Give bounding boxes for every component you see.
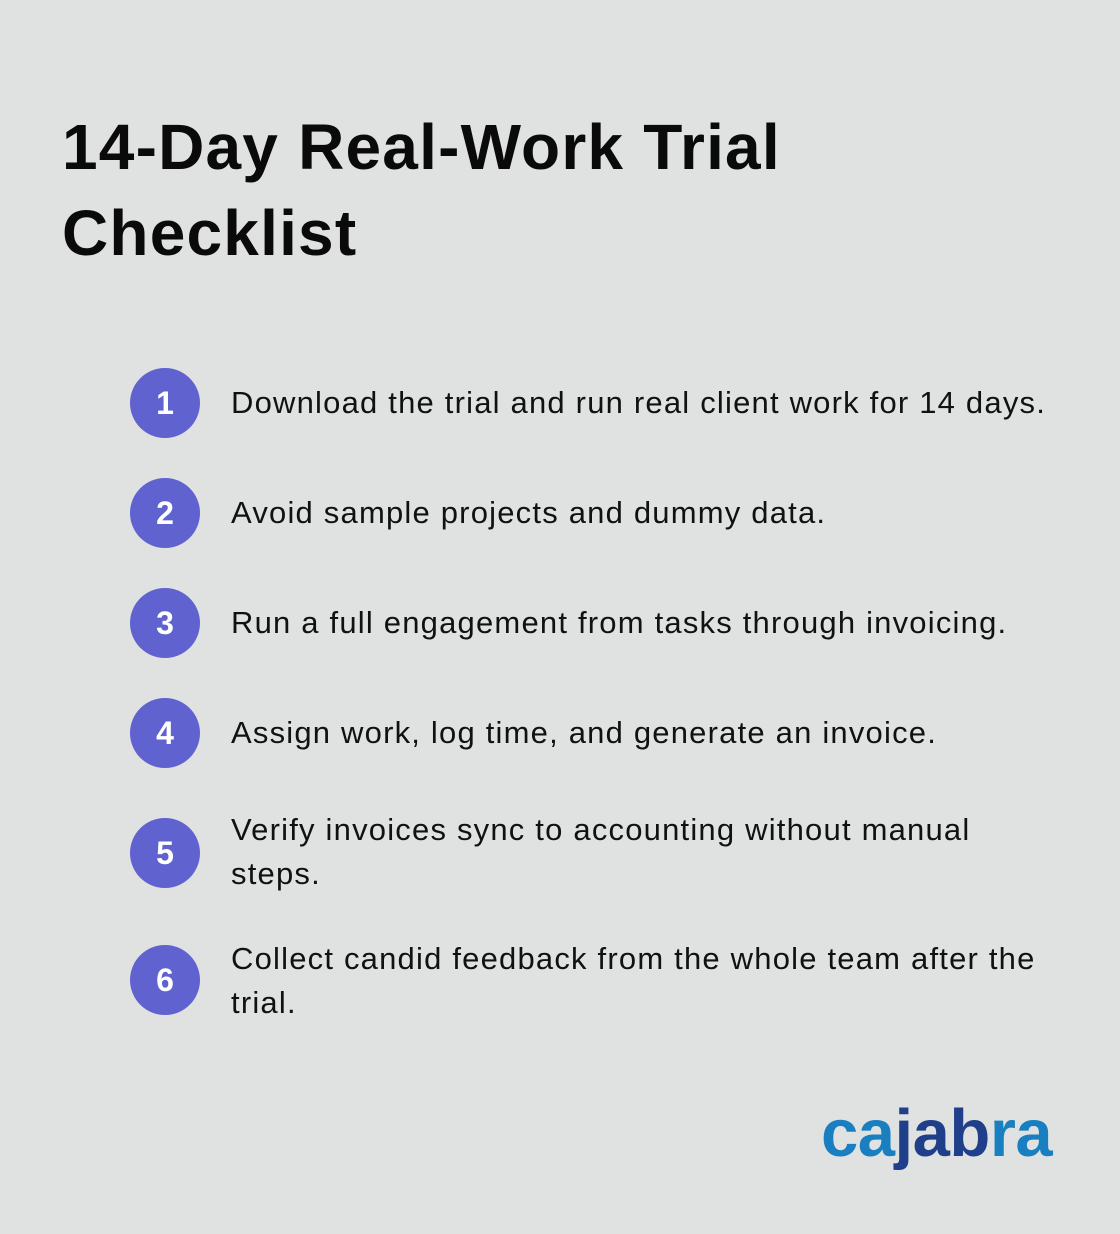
item 1: 1 xyxy=(156,385,174,421)
item 4: 4 xyxy=(156,715,174,751)
item 5: 5 xyxy=(156,835,174,871)
item 6: Collect candid feedback from the whole team after the trial. xyxy=(231,941,1036,1020)
item 1: Download the trial and run real client work for 14 days. xyxy=(231,385,1046,420)
item 3 xyxy=(130,588,1007,658)
item 2: Avoid sample projects and dummy data. xyxy=(231,495,826,530)
logo: cajabra xyxy=(821,1096,1052,1171)
title: Checklist xyxy=(62,197,357,269)
item 4 xyxy=(130,698,937,768)
item 3: 3 xyxy=(156,605,174,641)
title xyxy=(62,111,781,269)
item 5: Verify invoices sync to accounting without manual steps. xyxy=(231,812,970,891)
item 2 xyxy=(130,478,826,548)
item 1 xyxy=(130,368,1046,438)
item 4: Assign work, log time, and generate an invoice. xyxy=(231,715,937,750)
item 6: 6 xyxy=(156,962,174,998)
item 2: 2 xyxy=(156,495,174,531)
title: 14-Day Real-Work Trial xyxy=(62,111,781,183)
item 3: Run a full engagement from tasks through invoicing. xyxy=(231,605,1007,640)
